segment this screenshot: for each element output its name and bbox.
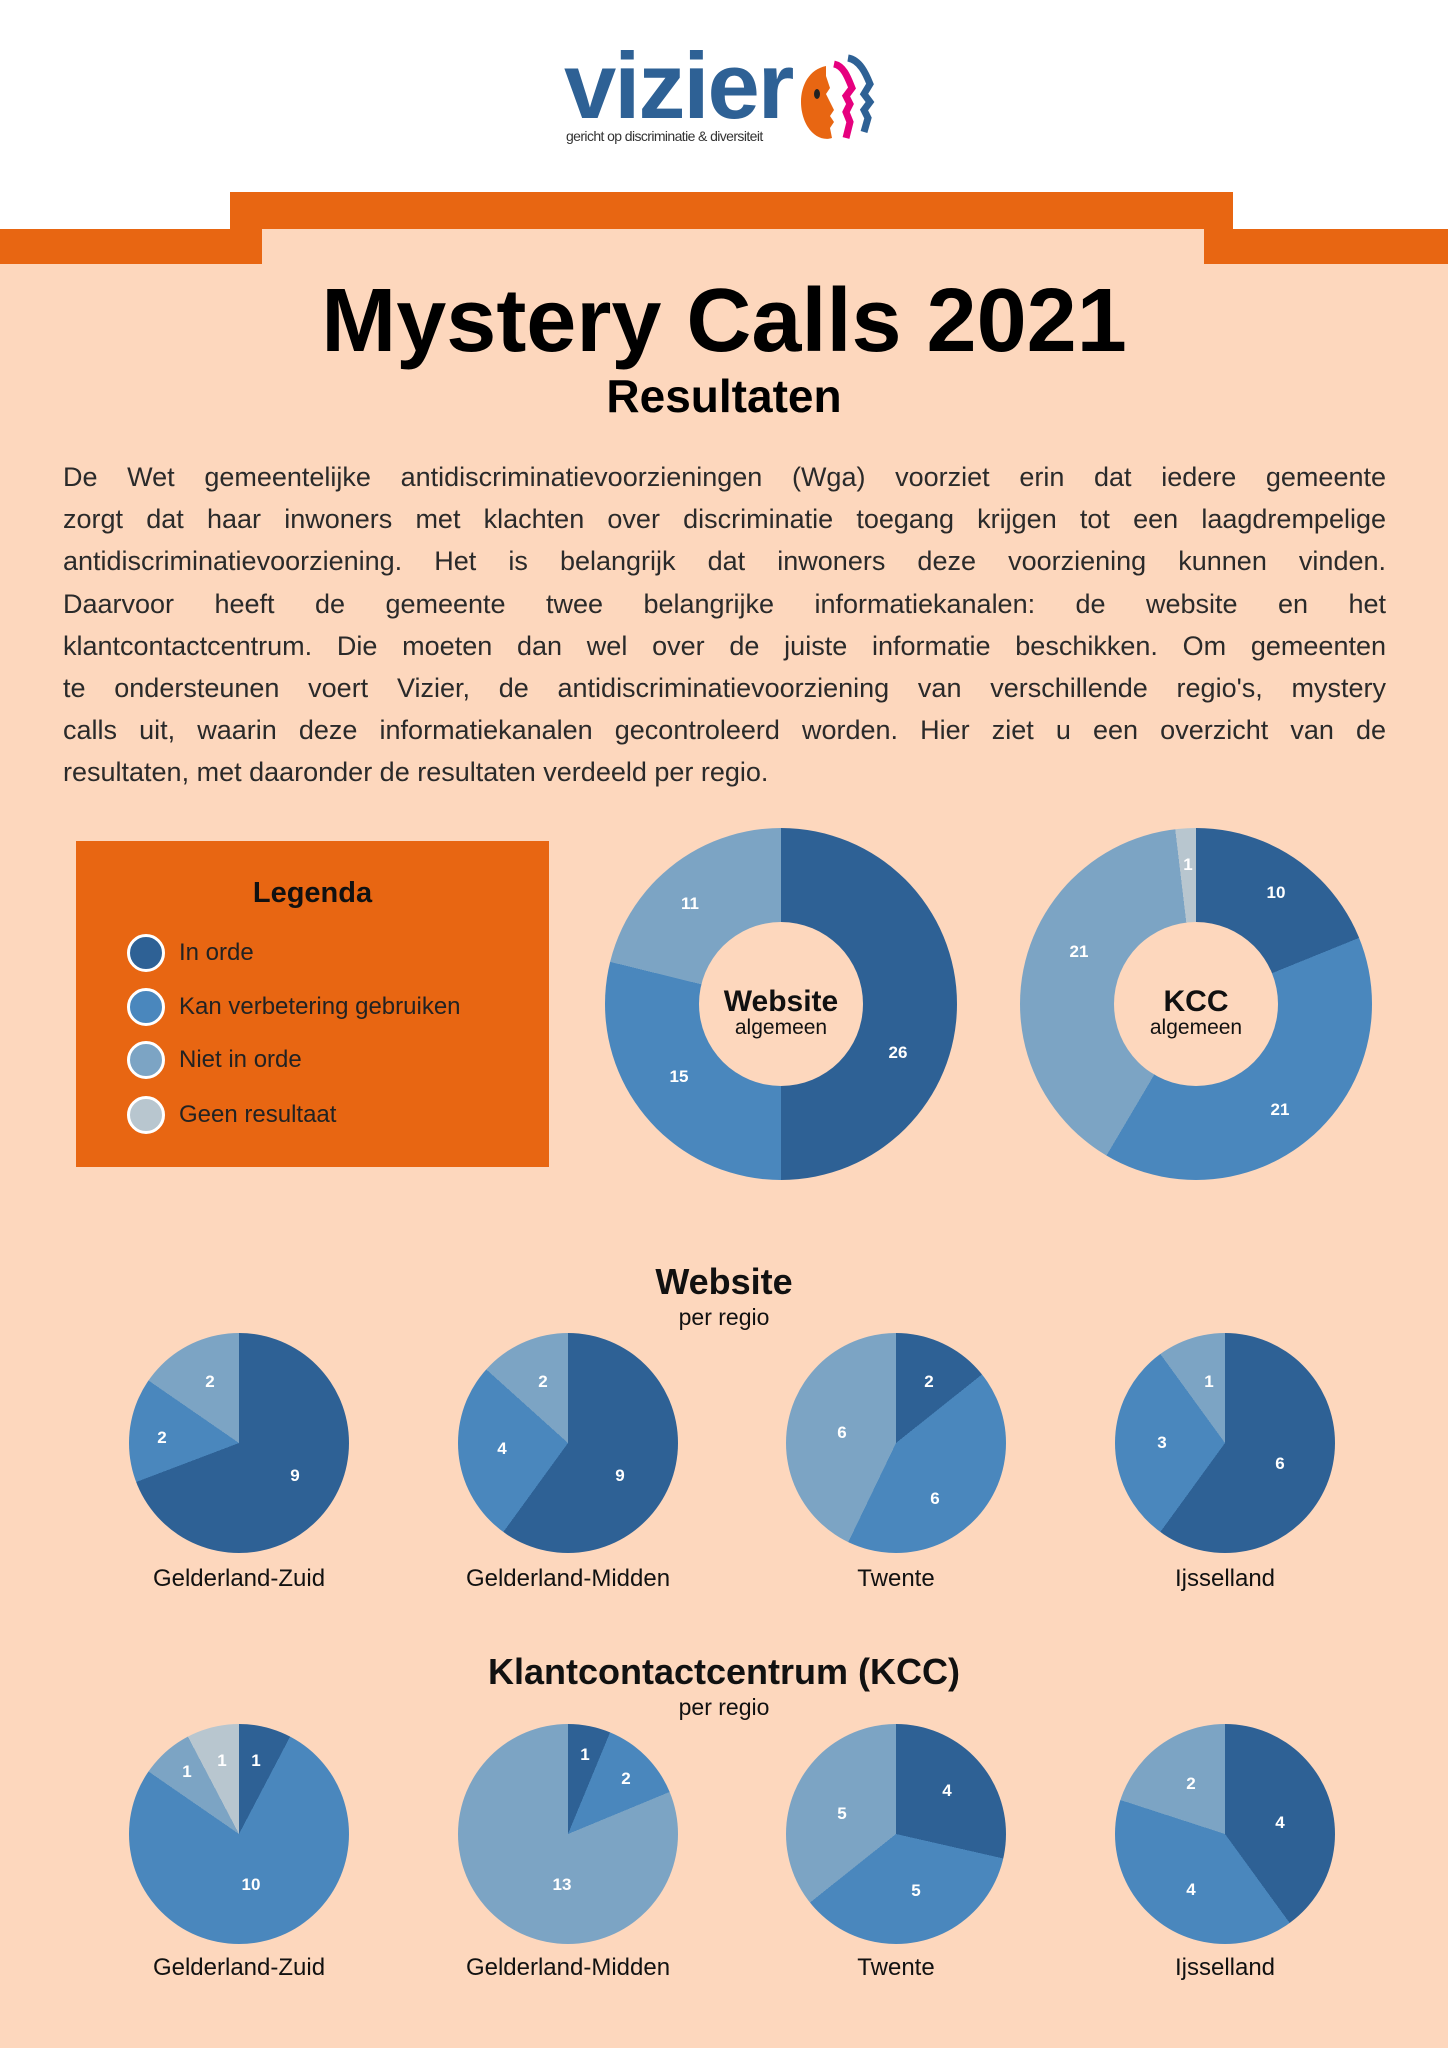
text: 6 xyxy=(837,1423,847,1442)
region labels row 1 xyxy=(153,1565,1275,1592)
pie: KCC Ijsselland xyxy=(1115,1724,1335,1944)
text: 2 xyxy=(157,1428,167,1447)
text: 9 xyxy=(290,1466,300,1485)
intro paragraph: te ondersteunen voert Vizier, de antidiscriminatievoorziening van verschillende regio's, mystery xyxy=(63,673,1386,703)
legend item: niet in orde xyxy=(127,1041,302,1079)
heading: KCC per regio: per regio xyxy=(679,1694,769,1720)
text: 5 xyxy=(837,1804,847,1823)
pie: KCC Gelderland-Zuid xyxy=(129,1724,349,1944)
text: 1 xyxy=(1204,1372,1214,1391)
heading: KCC per regio xyxy=(488,1651,960,1720)
logo tagline: gericht op discriminatie & diversiteit xyxy=(566,128,763,144)
region labels row 1: Twente xyxy=(857,1565,935,1592)
region labels row 2: Ijsselland xyxy=(1175,1954,1275,1981)
text: 4 xyxy=(497,1439,507,1458)
text: 3 xyxy=(1157,1433,1167,1452)
legend item: geen resultaat xyxy=(127,1096,336,1134)
text: 1 xyxy=(580,1745,590,1764)
text: 2 xyxy=(1186,1774,1196,1793)
pie: KCC Twente xyxy=(786,1724,1006,1944)
pie: website Ijsselland xyxy=(1115,1333,1335,1553)
legend item: kan verbetering xyxy=(127,988,461,1026)
text: 1 xyxy=(182,1762,192,1781)
logo text: vizier xyxy=(564,33,792,138)
heading: KCC per regio: Klantcontactcentrum (KCC) xyxy=(488,1651,960,1692)
text: 9 xyxy=(615,1466,625,1485)
donut: KCC algemeen xyxy=(1020,828,1372,1180)
region labels row 1: Ijsselland xyxy=(1175,1565,1275,1592)
legend item: in orde xyxy=(127,934,254,972)
donut: website algemeen xyxy=(605,828,957,1180)
header white area xyxy=(0,0,1448,264)
text: 4 xyxy=(942,1781,952,1800)
logo xyxy=(564,33,874,144)
region labels row 1: Gelderland-Zuid xyxy=(153,1565,325,1592)
donut: website algemeen: 15 xyxy=(670,1067,688,1086)
text: 6 xyxy=(1275,1454,1285,1473)
intro paragraph: antidiscriminatievoorziening. Het is belangrijk dat inwoners deze voorziening kunnen vinden. xyxy=(63,546,1386,576)
heading: website per regio xyxy=(655,1261,793,1330)
donut: KCC algemeen: KCC xyxy=(1164,985,1228,1018)
pie: website Gelderland-Zuid xyxy=(129,1333,349,1553)
donut: KCC algemeen: 10 xyxy=(1267,883,1285,902)
legend item: geen resultaat: Geen resultaat xyxy=(179,1101,336,1128)
legend item: kan verbetering: Kan verbetering gebruiken xyxy=(179,993,461,1020)
subtitle: Resultaten xyxy=(606,370,842,422)
donut: KCC algemeen: 21 xyxy=(1070,942,1088,961)
legend item: in orde: In orde xyxy=(179,939,254,966)
pie: KCC Gelderland-Midden xyxy=(458,1724,678,1944)
region labels row 1: Gelderland-Midden xyxy=(466,1565,670,1592)
donut: website algemeen: 26 xyxy=(889,1043,907,1062)
text: 13 xyxy=(553,1875,571,1894)
donut: KCC algemeen: 21 xyxy=(1271,1100,1289,1119)
intro paragraph: Daarvoor heeft de gemeente twee belangrijke informatiekanalen: de website en het xyxy=(63,589,1386,619)
heading: website per regio: per regio xyxy=(679,1304,769,1330)
text: 6 xyxy=(930,1489,940,1508)
text: 2 xyxy=(205,1372,215,1391)
donut: KCC algemeen: algemeen xyxy=(1150,1016,1242,1039)
text: 4 xyxy=(1186,1880,1196,1899)
text: 4 xyxy=(1275,1813,1285,1832)
region labels row 2: Gelderland-Zuid xyxy=(153,1954,325,1981)
text: 10 xyxy=(242,1875,260,1894)
intro paragraph: zorgt dat haar inwoners met klachten over discriminatie toegang krijgen tot een laagdrempelige xyxy=(63,504,1386,534)
pie: website Gelderland-Midden xyxy=(458,1333,678,1553)
region labels row 2: Twente xyxy=(857,1954,935,1981)
legend title: Legenda xyxy=(253,877,372,909)
donut: website algemeen: 11 xyxy=(681,894,699,913)
panel: legend xyxy=(76,841,549,1167)
region labels row 2 xyxy=(153,1954,1275,1981)
text: 5 xyxy=(911,1881,921,1900)
donut: KCC algemeen: 1 xyxy=(1183,855,1193,874)
region labels row 2: Gelderland-Midden xyxy=(466,1954,670,1981)
intro paragraph xyxy=(63,462,1386,787)
text: 1 xyxy=(217,1751,227,1770)
text: 2 xyxy=(538,1372,548,1391)
text: 1 xyxy=(251,1751,261,1770)
orange header band xyxy=(0,229,1448,264)
title: Mystery Calls 2021 xyxy=(321,271,1127,371)
donut: website algemeen: algemeen xyxy=(735,1016,827,1039)
intro paragraph: klantcontactcentrum. Die moeten dan wel over de juiste informatie beschikken. Om gemeenten xyxy=(63,631,1386,661)
legend item: niet in orde: Niet in orde xyxy=(179,1046,302,1073)
intro paragraph: De Wet gemeentelijke antidiscriminatievoorzieningen (Wga) voorziet erin dat iedere gemeente xyxy=(63,462,1386,492)
intro paragraph: resultaten, met daaronder de resultaten verdeeld per regio. xyxy=(63,757,768,787)
text: 2 xyxy=(924,1372,934,1391)
pie: website Twente xyxy=(786,1333,1006,1553)
intro paragraph: calls uit, waarin deze informatiekanalen gecontroleerd worden. Hier ziet u een overzicht van de xyxy=(63,715,1386,745)
icon: faces xyxy=(801,54,874,139)
heading: website per regio: Website xyxy=(655,1261,793,1302)
donut: website algemeen: Website xyxy=(724,985,838,1018)
text: 2 xyxy=(621,1769,631,1788)
